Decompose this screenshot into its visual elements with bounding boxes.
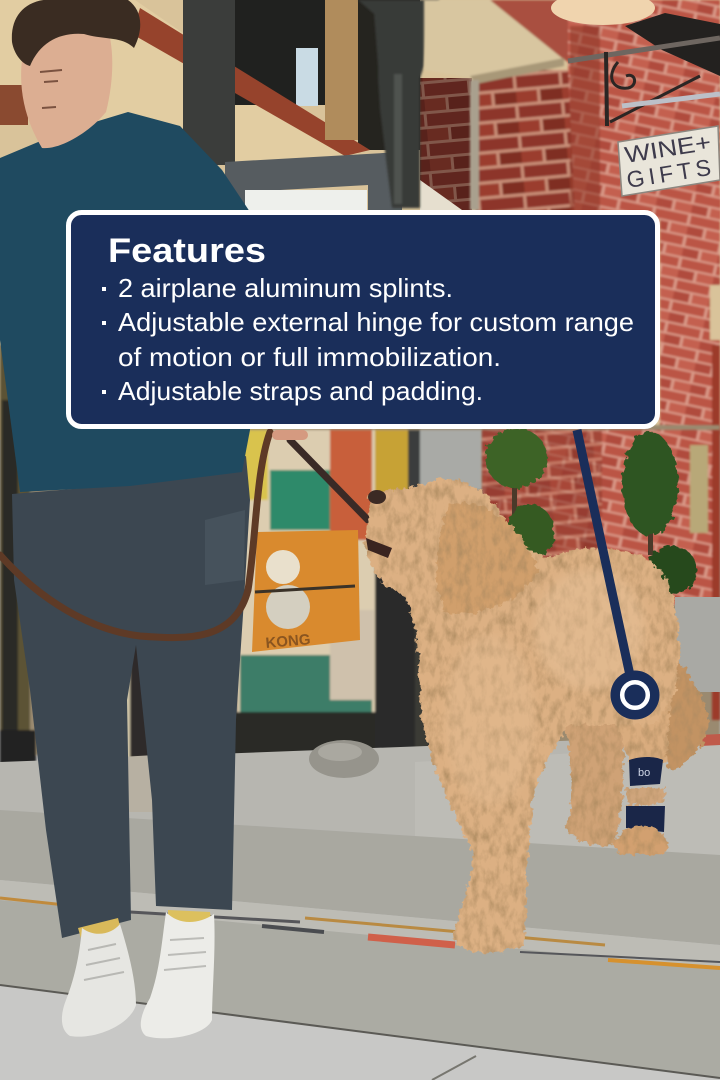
sign: wine + gifts: GIFTS	[625, 154, 713, 193]
brick wall lower right	[482, 430, 720, 720]
dog: body and front leg	[365, 478, 679, 953]
heading: features: Features	[108, 232, 266, 270]
sign: wine + gifts: WINE+	[623, 129, 713, 168]
callout marker	[610, 670, 660, 720]
leader line to brace marker	[577, 430, 631, 680]
list item: hinge	[102, 307, 634, 372]
dog: brace logo: bo	[638, 767, 650, 779]
dog: near hind leg	[608, 690, 672, 762]
man: right sock	[168, 910, 212, 928]
dog	[365, 478, 708, 953]
dog: brace lower	[626, 806, 665, 832]
shopping bag in window: KONG	[265, 631, 311, 652]
man: left shoe	[62, 924, 136, 1037]
man: hand	[272, 430, 308, 440]
sign: wine + gifts	[618, 126, 720, 196]
storefront background	[0, 345, 720, 815]
list item: hinge: Adjustable external hinge for custom range	[118, 307, 634, 337]
man	[0, 0, 250, 1038]
shopping bag in window	[252, 530, 360, 652]
leash	[0, 432, 368, 638]
dog: far hind leg	[565, 715, 625, 846]
man: hair	[12, 0, 140, 66]
dog: chest highlight	[445, 635, 535, 805]
pavement and steps	[0, 734, 720, 1080]
man: facial features	[40, 70, 62, 108]
dog: ear	[437, 503, 538, 614]
dog: nose	[368, 490, 386, 504]
dog: brace upper	[629, 757, 663, 786]
man: pants	[12, 456, 250, 938]
man: shirt	[0, 112, 250, 492]
dog: fur between brace straps	[626, 788, 666, 806]
dog: body highlight	[535, 570, 645, 690]
man: pants pocket shading	[205, 510, 245, 585]
topiary plants and planter	[485, 428, 720, 692]
list item: straps: Adjustable straps and padding.	[118, 376, 483, 406]
man: neck and face	[21, 22, 112, 148]
awning and sign bracket	[568, 13, 720, 126]
hanging lamp	[551, 0, 655, 25]
brick wall right edge	[660, 195, 720, 435]
panel: features	[68, 212, 658, 426]
rock	[309, 740, 379, 778]
building background upper	[0, 0, 720, 440]
man: left sock	[78, 918, 122, 942]
dog: mouth	[366, 538, 392, 558]
brick wall upper right	[424, 0, 720, 220]
list item: splints: 2 airplane aluminum splints.	[118, 273, 453, 303]
dog: near hind paw	[615, 824, 668, 855]
dog: tail	[660, 650, 708, 769]
list item: hinge: of motion or full immobilization.	[118, 342, 501, 372]
ornate column	[358, 0, 440, 208]
man: right shoe	[141, 912, 215, 1038]
